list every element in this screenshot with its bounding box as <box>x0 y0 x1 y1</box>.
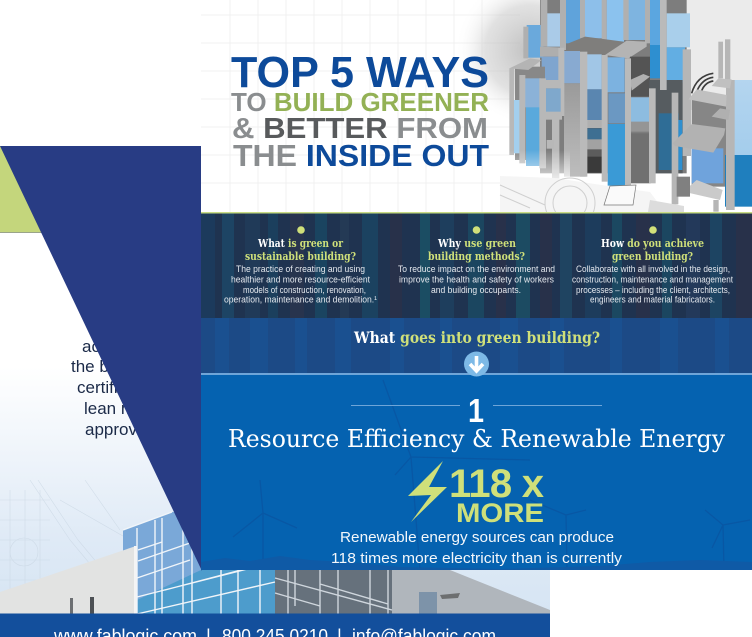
body text fragments: the bu <box>71 357 118 376</box>
column: why use green building: improve the health and safety of workers <box>399 274 554 284</box>
left wing <box>515 67 545 160</box>
section question heading: What goes into green building? <box>353 328 600 347</box>
body text fragments: approve <box>85 420 146 439</box>
footer bar <box>0 614 550 637</box>
panel: resource efficiency <box>201 373 752 570</box>
column: why use green building: building methods? <box>428 249 525 263</box>
title <box>231 48 489 173</box>
right wing <box>692 100 728 187</box>
column: how to achieve green building: processes – including the client, architects, <box>576 285 730 295</box>
title: TOP 5 WAYS <box>231 48 489 97</box>
upper glass <box>527 25 543 58</box>
body text fragments <box>71 337 146 439</box>
column: what is green building <box>224 226 377 304</box>
roof slab <box>605 41 647 58</box>
statistic: 118 x <box>449 462 544 506</box>
section number: 1 <box>468 392 484 429</box>
panel: header <box>201 0 752 228</box>
coil <box>692 73 713 93</box>
ground fade over model <box>500 150 570 190</box>
body text fragments: lean ma <box>84 399 145 418</box>
building photo <box>0 508 550 614</box>
main concrete body <box>564 83 586 177</box>
column: how to achieve green building: engineers and material fabricators. <box>590 294 715 304</box>
column: how to achieve green building: How do you achieve <box>601 236 704 250</box>
column: why use green building <box>398 226 555 295</box>
body text fragments: ac <box>82 337 100 356</box>
blueprint sketch background <box>0 480 130 600</box>
blueprint ground <box>500 176 684 228</box>
column: why use green building: To reduce impact on the environment and <box>398 264 555 274</box>
column: what is green building: sustainable building? <box>245 249 356 263</box>
blueprint grid <box>201 0 520 212</box>
window mullions <box>123 512 392 614</box>
body text fragments: certific <box>77 378 127 397</box>
description <box>331 529 623 567</box>
column: how to achieve green building: green building? <box>612 249 693 263</box>
title: TO BUILD GREENER <box>231 87 489 117</box>
upper columns <box>523 0 650 58</box>
title: & BETTER FROM <box>232 113 488 145</box>
column: what is green building: healthier and more resource-efficient <box>231 274 370 284</box>
lower glass <box>587 89 602 120</box>
tall columns <box>552 0 667 187</box>
statistic: MORE <box>456 498 544 528</box>
column: how to achieve green building: construction, maintenance and management <box>572 274 733 284</box>
dark shaft <box>568 37 623 57</box>
illustration: building model <box>509 0 752 212</box>
column: how to achieve green building <box>572 226 733 304</box>
section heading: Resource Efficiency & Renewable Energy <box>228 425 725 453</box>
statistic <box>449 462 544 528</box>
panel: back page <box>0 146 550 637</box>
mid glass <box>542 57 559 81</box>
column: what is green building: What is green or <box>257 236 344 250</box>
description: Renewable energy sources can produce <box>340 529 614 546</box>
column: why use green building: and building occupants. <box>431 285 521 295</box>
icon: down arrow <box>464 352 489 376</box>
green corner banner <box>0 146 70 233</box>
title: THE INSIDE OUT <box>233 138 489 173</box>
column: what is green building: models of construction, renovation, <box>243 285 366 295</box>
icon: lightning bolt <box>408 461 447 522</box>
column: how to achieve green building: Collaborate with all involved in the design, <box>576 264 730 274</box>
panel: definitions band <box>201 212 752 318</box>
navy diagonal triangle <box>0 146 202 571</box>
dark interior <box>630 57 650 97</box>
panel: what goes into green building <box>201 318 752 373</box>
wind turbines background <box>233 380 750 570</box>
column: why use green building: Why use green <box>437 236 517 250</box>
mountains <box>201 556 752 570</box>
column: what is green building: The practice of creating and using <box>236 264 365 274</box>
description: 118 times more electricity than is currently <box>331 550 623 567</box>
column: what is green building: operation, maintenance and demolition.¹ <box>224 294 377 304</box>
